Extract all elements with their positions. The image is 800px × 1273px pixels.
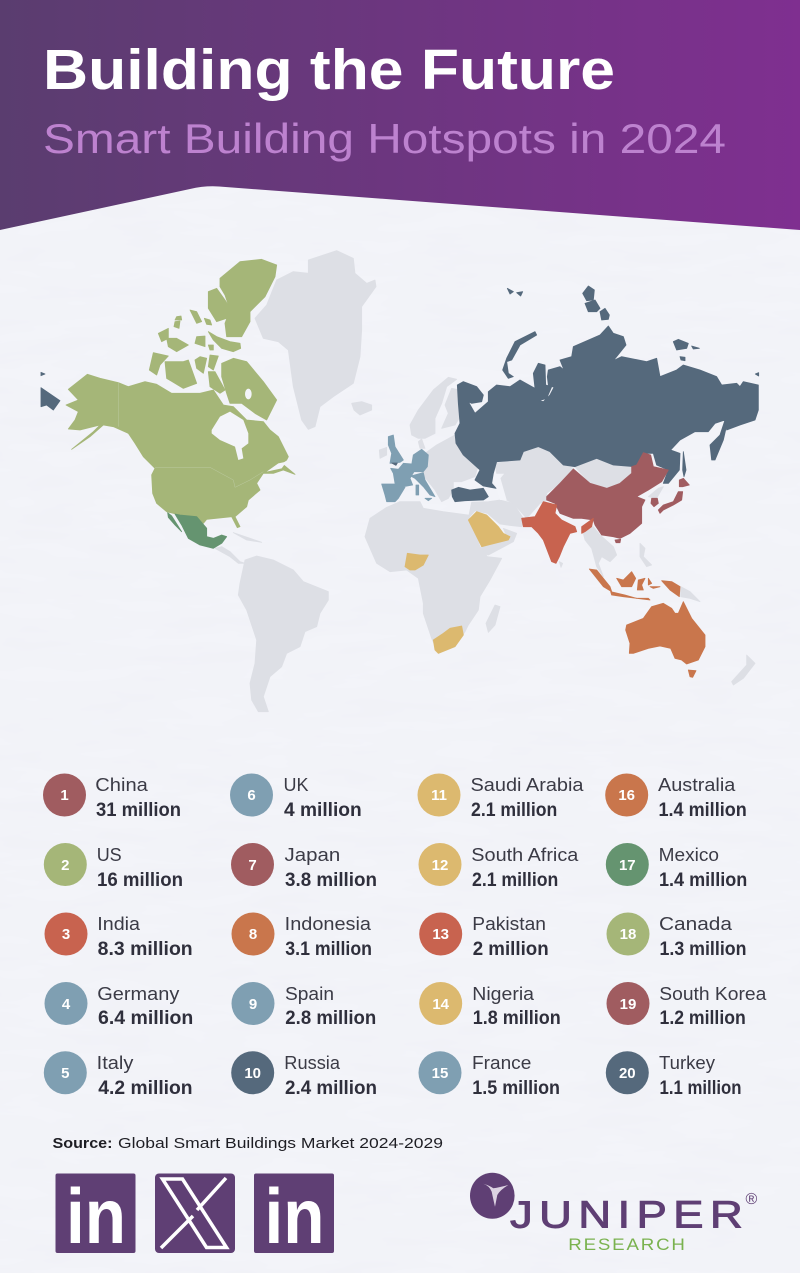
- item 9 Spain: Spain: [285, 984, 334, 1004]
- item 8 Indonesia: [232, 912, 372, 960]
- item 19 South Korea: [606, 982, 767, 1029]
- item 3 India: 3: [62, 926, 70, 943]
- item 10 Russia: 10: [244, 1065, 261, 1082]
- item 20 Turkey: 1.1 million: [660, 1078, 742, 1099]
- americas: [41, 251, 376, 712]
- item 14 Nigeria: 1.8 million: [473, 1008, 561, 1029]
- item 8 Indonesia: 8: [249, 926, 257, 943]
- item 10 Russia: [231, 1051, 377, 1099]
- item 12 South Africa: 2.1 million: [472, 870, 558, 891]
- Saudi Arabia, Nigeria, South Africa: [405, 512, 510, 653]
- item 17 Mexico: 1.4 million: [659, 870, 747, 891]
- item 1 China: China: [95, 775, 149, 795]
- item 13 Pakistan: 2 million: [473, 939, 549, 960]
- China, Japan, South Korea: [547, 453, 689, 543]
- item 19 South Korea: 19: [620, 996, 636, 1013]
- item 7 Japan: 3.8 million: [285, 870, 377, 891]
- borders: [118, 383, 263, 487]
- item 20 Turkey: 20: [619, 1065, 636, 1082]
- US and Canada: [66, 259, 295, 528]
- source line: Source:: [52, 1135, 112, 1152]
- item 18 Canada: [606, 912, 746, 960]
- item 11 Saudi Arabia: 2.1 million: [471, 800, 557, 821]
- item 19 South Korea: 1.2 million: [660, 1008, 746, 1029]
- item 5 Italy: Italy: [97, 1053, 133, 1073]
- Hudson Bay and inland water: [212, 389, 287, 472]
- subtitle: Smart Building Hotspots in 2024: [43, 115, 726, 162]
- item 8 Indonesia: Indonesia: [285, 914, 372, 934]
- header banner: [0, 0, 800, 230]
- item 17 Mexico: 17: [619, 857, 636, 874]
- item 11 Saudi Arabia: Saudi Arabia: [470, 775, 585, 795]
- icon: X: [155, 1174, 235, 1253]
- source line: Global Smart Buildings Market 2024-2029: [118, 1135, 443, 1152]
- item 10 Russia: 2.4 million: [285, 1078, 377, 1099]
- logo: Juniper Research: RESEARCH: [568, 1235, 685, 1254]
- item 6 UK: 4 million: [284, 800, 362, 821]
- logo: Juniper Research: JUNIPER: [510, 1193, 743, 1236]
- item 12 South Africa: South Africa: [471, 845, 579, 865]
- item 6 UK: 6: [247, 787, 256, 804]
- item 12 South Africa: 12: [432, 857, 448, 874]
- Africa, Asia and Oceania: [365, 286, 759, 685]
- item 12 South Africa: [418, 843, 579, 891]
- item 16 Australia: [605, 774, 747, 821]
- title: Building the Future: [43, 38, 615, 102]
- item 2 US: 16 million: [97, 870, 183, 891]
- item 4 Germany: [44, 982, 193, 1029]
- icon: LinkedIn: in: [264, 1172, 324, 1260]
- item 15 France: 1.5 million: [472, 1078, 560, 1099]
- item 5 Italy: 4.2 million: [98, 1078, 193, 1099]
- item 8 Indonesia: 3.1 million: [285, 939, 372, 960]
- item 5 Italy: 5: [61, 1065, 69, 1082]
- far east Russia: [41, 372, 60, 410]
- item 3 India: [44, 912, 193, 960]
- Europe: [379, 377, 478, 502]
- item 20 Turkey: [606, 1051, 742, 1099]
- item 18 Canada: 1.3 million: [660, 939, 746, 960]
- item 15 France: 15: [432, 1065, 448, 1082]
- item 1 China: [43, 774, 181, 821]
- Indonesia and Australia: [589, 569, 705, 677]
- item 1 China: 1: [60, 787, 69, 804]
- Mexico: [168, 513, 227, 548]
- item 13 Pakistan: 13: [432, 926, 449, 943]
- item 9 Spain: [232, 982, 376, 1029]
- item 20 Turkey: Turkey: [659, 1053, 715, 1073]
- item 18 Canada: 18: [620, 926, 636, 943]
- item 7 Japan: Japan: [284, 845, 340, 865]
- item 7 Japan: [231, 843, 377, 891]
- item 5 Italy: [44, 1051, 193, 1099]
- item 14 Nigeria: [419, 982, 561, 1029]
- UK, France, Germany, Spain, Italy: [382, 435, 435, 502]
- grey countries: [365, 447, 755, 685]
- item 7 Japan: 7: [248, 857, 257, 874]
- logo: Juniper Research: ®: [746, 1191, 758, 1208]
- item 11 Saudi Arabia: 11: [431, 787, 447, 804]
- logo: Juniper Research: [470, 1173, 758, 1254]
- item 2 US: 2: [61, 857, 69, 874]
- item 4 Germany: 4: [62, 996, 71, 1013]
- item 6 UK: [230, 774, 362, 821]
- item 16 Australia: 16: [618, 787, 635, 804]
- item 19 South Korea: South Korea: [659, 984, 767, 1004]
- grey Europe: [379, 377, 478, 502]
- item 4 Germany: 6.4 million: [98, 1008, 193, 1029]
- item 3 India: 8.3 million: [98, 939, 193, 960]
- item 17 Mexico: [606, 843, 747, 891]
- item 16 Australia: 1.4 million: [658, 800, 747, 821]
- item 2 US: [44, 843, 183, 891]
- icon: LinkedIn: in: [66, 1172, 126, 1260]
- item 13 Pakistan: [419, 912, 549, 960]
- item 18 Canada: Canada: [659, 914, 733, 934]
- ranking legend: [43, 774, 767, 1099]
- item 1 China: 31 million: [96, 800, 181, 821]
- item 9 Spain: 9: [249, 996, 257, 1013]
- Caspian Sea: [493, 477, 507, 500]
- item 3 India: India: [97, 914, 141, 934]
- item 10 Russia: Russia: [284, 1053, 341, 1073]
- item 11 Saudi Arabia: [418, 774, 585, 821]
- item 17 Mexico: Mexico: [659, 845, 719, 865]
- India and Pakistan: [522, 502, 593, 563]
- item 13 Pakistan: Pakistan: [472, 914, 546, 934]
- item 9 Spain: 2.8 million: [285, 1008, 376, 1029]
- Greenland, Iceland and grey Americas: [215, 251, 376, 712]
- item 16 Australia: Australia: [658, 775, 736, 795]
- item 2 US: US: [97, 845, 122, 865]
- Russia and Turkey: [392, 286, 759, 502]
- item 15 France: France: [472, 1053, 531, 1073]
- item 14 Nigeria: Nigeria: [472, 984, 535, 1004]
- world map: [41, 251, 759, 712]
- item 6 UK: UK: [284, 775, 309, 795]
- item 4 Germany: Germany: [97, 984, 179, 1004]
- item 14 Nigeria: 14: [432, 996, 450, 1013]
- item 15 France: [418, 1051, 560, 1099]
